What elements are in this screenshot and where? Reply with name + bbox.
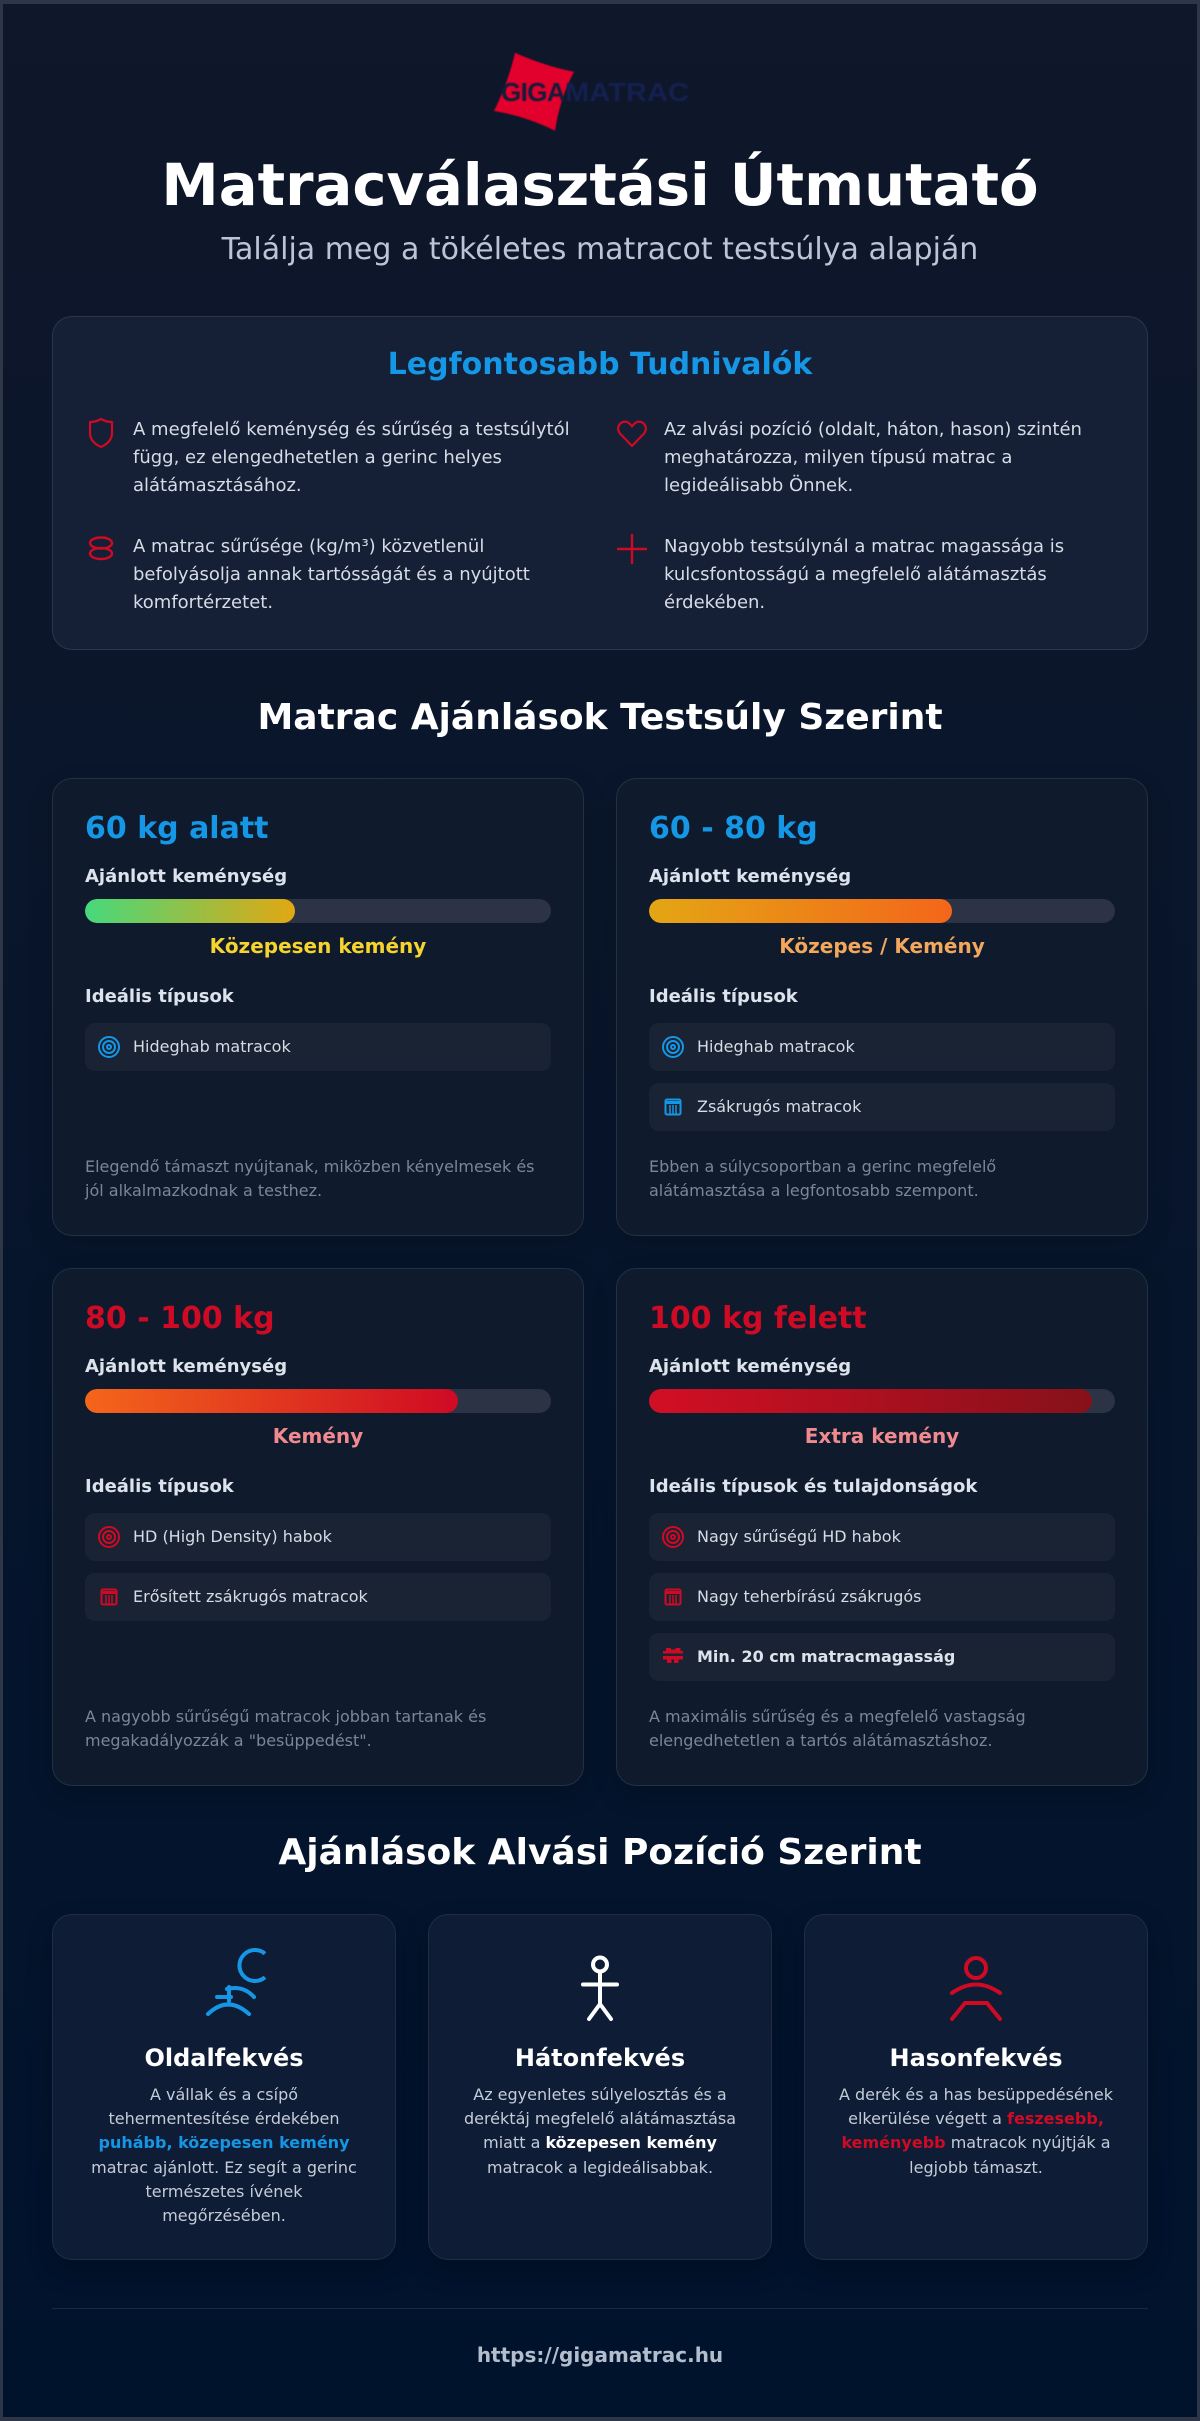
position card: side	[52, 1914, 396, 2260]
firmness bar	[85, 899, 551, 923]
icon: spring box	[100, 1588, 118, 1606]
section heading: weight: Matrac Ajánlások Testsúly Szerint	[257, 697, 943, 738]
type: minimum height: Min. 20 cm matracmagasság	[697, 1647, 955, 1666]
card heading: 80 - 100 kg	[85, 1301, 275, 1336]
weight card: under 60 kg	[52, 778, 584, 1236]
position text	[839, 2085, 1113, 2177]
position text: matracok a legideálisabbak.	[487, 2158, 713, 2177]
note	[84, 1157, 535, 1200]
position text: megőrzésében.	[162, 2206, 286, 2225]
fact text: position: legideálisabb Önnek.	[664, 475, 853, 496]
icon: spring box	[664, 1588, 682, 1606]
type: minimum height	[649, 1633, 1115, 1681]
type: cold foam	[85, 1023, 551, 1071]
icon: target	[662, 1526, 684, 1548]
fact text: firmness	[133, 419, 570, 496]
icon: side sleeper	[206, 1948, 266, 2016]
fact text: density: A matrac sűrűsége (kg/m³) közvetlenül	[133, 536, 484, 557]
position text: elkerülése végett a feszesebb,	[848, 2109, 1104, 2128]
firmness bar	[649, 1389, 1115, 1413]
fact text: position	[664, 419, 1082, 496]
icon: density	[88, 536, 114, 560]
fact text: height: Nagyobb testsúlynál a matrac magassága is	[664, 536, 1064, 557]
note: Ebben a súlycsoportban a gerinc megfelelő	[649, 1157, 996, 1176]
logo wordmark: GIGA	[501, 77, 565, 107]
type: heavy-duty spring	[649, 1573, 1115, 1621]
type: cold foam: Hideghab matracok	[133, 1037, 291, 1056]
position text: deréktáj megfelelő alátámasztása	[464, 2109, 736, 2128]
position text: tehermentesítése érdekében	[108, 2109, 340, 2128]
fact text: position: meghatározza, milyen típusú matrac a	[664, 447, 1012, 468]
position title: Hasonfekvés	[889, 2044, 1063, 2072]
subtitle: Találja meg a tökéletes matracot testsúlya alapján	[222, 232, 978, 267]
icon: spring box	[664, 1098, 682, 1116]
types label: Ideális típusok	[85, 1476, 234, 1497]
icon: shield	[88, 418, 114, 448]
type: pocket spring	[649, 1083, 1115, 1131]
note: Elegendő támaszt nyújtanak, miközben kényelmesek és	[85, 1157, 535, 1176]
note: A nagyobb sűrűségű matracok jobban tartanak és	[85, 1707, 486, 1726]
fact text: position: Az alvási pozíció (oldalt, háton, hason) szintén	[664, 419, 1082, 440]
type: reinforced spring	[85, 1573, 551, 1621]
logo mark	[494, 52, 574, 132]
fact text: density: komfortérzetet.	[133, 592, 273, 613]
icon: target	[98, 1526, 120, 1548]
note: jól alkalmazkodnak a testhez.	[85, 1181, 322, 1200]
firmness value: Extra kemény	[805, 1424, 959, 1448]
title: Matracválasztási Útmutató	[161, 152, 1039, 219]
weight card: 60-80 kg	[616, 778, 1148, 1236]
position text: legjobb támaszt.	[909, 2158, 1043, 2177]
note	[85, 1707, 486, 1750]
icon: stomach sleeper	[950, 1956, 1002, 2022]
logo wordmark: MATRAC	[565, 77, 689, 107]
note	[649, 1157, 996, 1200]
type: cold foam: Hideghab matracok	[697, 1037, 855, 1056]
logo wordmark	[501, 77, 689, 107]
type: HD foam	[649, 1513, 1115, 1561]
panel heading: Legfontosabb Tudnivalók	[388, 347, 812, 382]
card heading: 100 kg felett	[649, 1301, 867, 1336]
note: alátámasztása a legfontosabb szempont.	[649, 1181, 979, 1200]
position text: matrac ajánlott. Ez segít a gerinc	[91, 2158, 357, 2177]
firmness value: Közepesen kemény	[210, 934, 426, 958]
types label: Ideális típusok	[85, 986, 234, 1007]
icon: plus	[617, 534, 647, 564]
position text: természetes ívének	[146, 2182, 302, 2201]
section heading: positions: Ajánlások Alvási Pozíció Szerint	[278, 1832, 922, 1873]
note: A maximális sűrűség és a megfelelő vastagság	[649, 1707, 1026, 1726]
position title: Hátonfekvés	[515, 2044, 685, 2072]
fact text: height: érdekében.	[664, 592, 765, 613]
fact text: firmness: alátámasztásához.	[133, 475, 302, 496]
icon: target	[98, 1036, 120, 1058]
firmness label: Ajánlott keménység	[649, 1356, 851, 1377]
type: HD foam: Nagy sűrűségű HD habok	[697, 1527, 901, 1546]
types label: Ideális típusok	[649, 986, 798, 1007]
position text: A derék és a has besüppedésének	[839, 2085, 1113, 2104]
position text: Az egyenletes súlyelosztás és a	[473, 2085, 727, 2104]
icon: back sleeper	[581, 1956, 619, 2022]
firmness label: Ajánlott keménység	[649, 866, 851, 887]
position title: Oldalfekvés	[144, 2044, 304, 2072]
fact text: height	[664, 536, 1064, 613]
fact text: firmness: függ, ez elengedhetetlen a gerinc helyes	[133, 447, 502, 468]
note: elengedhetetlen a tartós alátámasztáshoz.	[649, 1731, 992, 1750]
types label: Ideális típusok és tulajdonságok	[649, 1476, 977, 1497]
type: HD foam: HD (High Density) habok	[133, 1527, 332, 1546]
type: cold foam	[649, 1023, 1115, 1071]
position card: stomach	[804, 1914, 1148, 2260]
firmness bar	[85, 1389, 551, 1413]
firmness label: Ajánlott keménység	[85, 1356, 287, 1377]
fact text: height: kulcsfontosságú a megfelelő alátámasztás	[664, 564, 1047, 585]
position card: back	[428, 1914, 772, 2260]
fact text: firmness: A megfelelő keménység és sűrűség a testsúlytól	[133, 419, 570, 440]
note: megakadályozzák a "besüppedést".	[85, 1731, 372, 1750]
type: heavy-duty spring: Nagy teherbírású zsákrugós	[697, 1587, 922, 1606]
position text: keményebb matracok nyújtják a	[841, 2133, 1111, 2152]
weight card: 80-100 kg	[52, 1268, 584, 1786]
fact text: density	[133, 536, 530, 613]
firmness bar	[649, 899, 1115, 923]
icon: target	[662, 1036, 684, 1058]
fact text: density: befolyásolja annak tartósságát és a nyújtott	[133, 564, 530, 585]
firmness value: Kemény	[273, 1424, 363, 1448]
firmness value: Közepes / Kemény	[779, 934, 985, 958]
position text: A vállak és a csípő	[150, 2085, 298, 2104]
logo	[494, 52, 689, 132]
icon: mattress height	[663, 1648, 683, 1663]
position text	[464, 2085, 736, 2177]
weight card: over 100 kg	[616, 1268, 1148, 1786]
icon: heart	[617, 420, 647, 448]
card heading: 60 kg alatt	[85, 811, 269, 846]
type: pocket spring: Zsákrugós matracok	[697, 1097, 861, 1116]
panel: key facts	[52, 316, 1148, 650]
card heading: 60 - 80 kg	[649, 811, 818, 846]
position text	[91, 2085, 357, 2225]
type: reinforced spring: Erősített zsákrugós matracok	[133, 1587, 368, 1606]
note	[649, 1707, 1026, 1750]
position text: miatt a közepesen kemény	[483, 2133, 717, 2152]
type: HD foam	[85, 1513, 551, 1561]
position text: puhább, közepesen kemény	[98, 2133, 350, 2152]
firmness label: Ajánlott keménység	[85, 866, 287, 887]
footer url: https://gigamatrac.hu	[477, 2343, 723, 2367]
